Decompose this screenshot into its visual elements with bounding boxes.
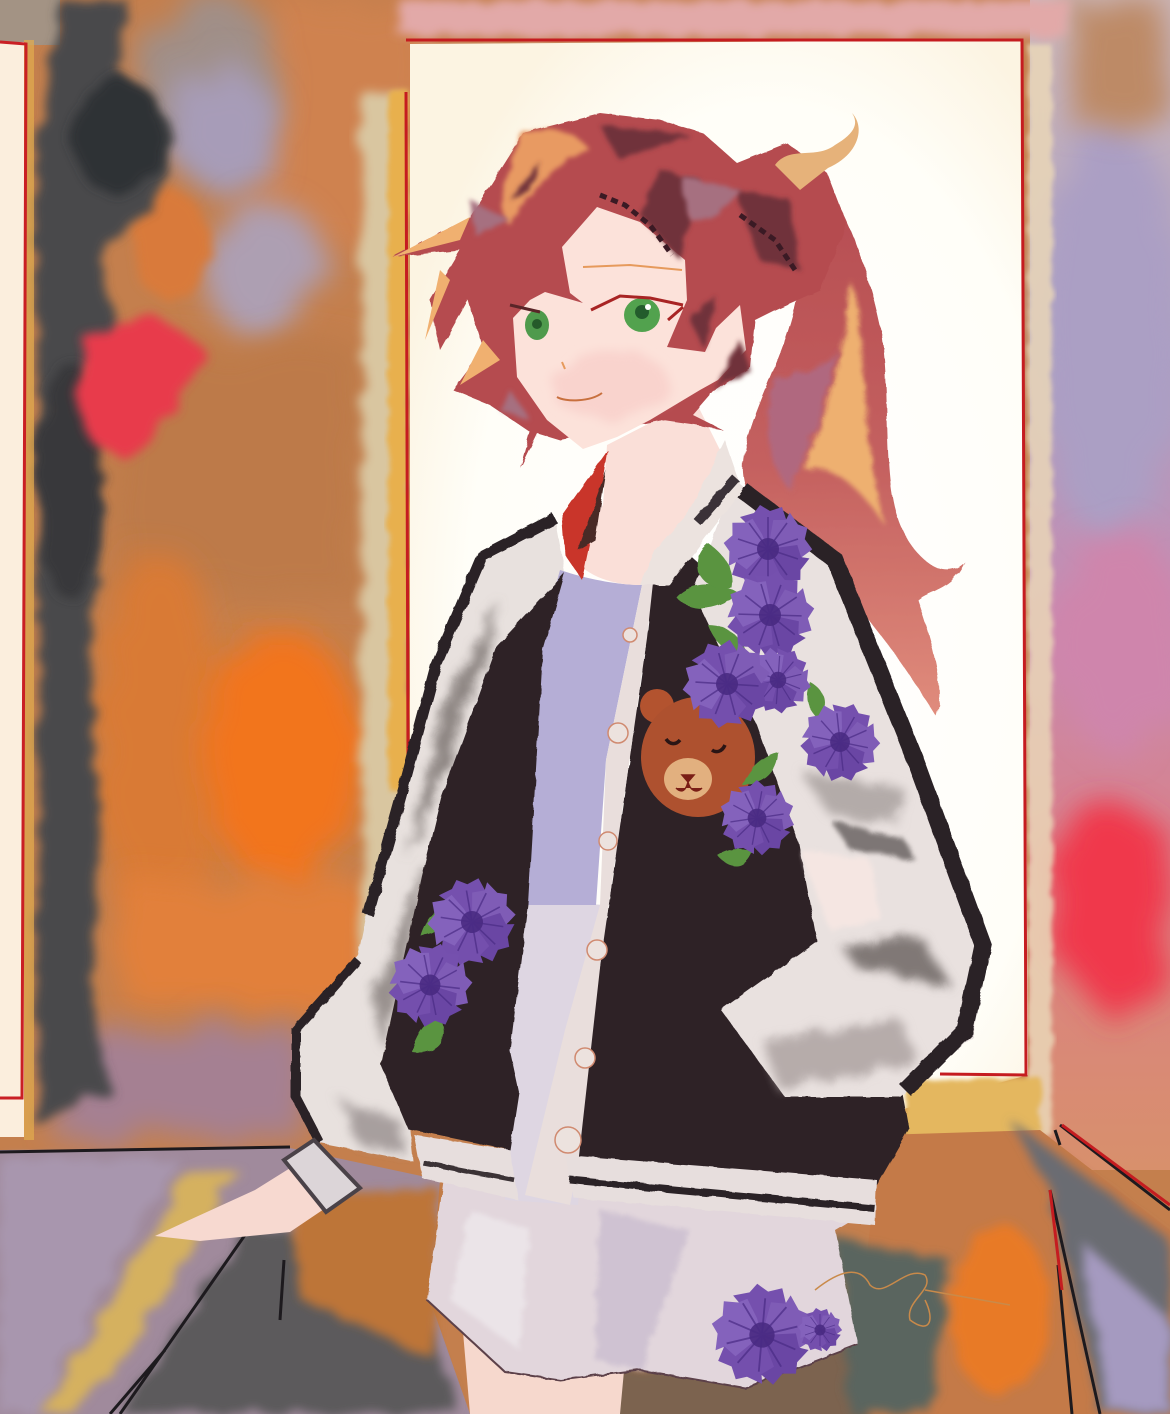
- red paint splash left: [75, 310, 205, 465]
- left raglan stripe: [368, 518, 555, 915]
- smile: [557, 393, 602, 400]
- lavender shirt: [520, 570, 642, 905]
- jacket left sleeve: [294, 518, 565, 1161]
- hair highlight: [503, 129, 590, 225]
- purple flowers: [366, 505, 898, 1400]
- signature flourish: [815, 1272, 1010, 1326]
- legs: [462, 1320, 625, 1414]
- left sleeve lower edge: [296, 960, 358, 1143]
- jacket black body left: [381, 573, 565, 1150]
- red paint splash right: [1040, 800, 1170, 1020]
- jacket right sleeve: [693, 480, 991, 1097]
- lavender wall shade right: [1040, 120, 1170, 540]
- brows and nose: [562, 265, 682, 369]
- hair lavender streak: [470, 175, 740, 420]
- doorway window: [362, 40, 1052, 1150]
- braid: [600, 195, 795, 270]
- ponytail: [743, 150, 965, 716]
- leaves: [412, 543, 824, 1052]
- face: [513, 207, 746, 449]
- left cuff: [284, 1140, 360, 1212]
- left window strip: [0, 42, 24, 1137]
- hand: [155, 1165, 330, 1241]
- cheek shading: [550, 350, 670, 420]
- hair dark streaks: [510, 125, 800, 390]
- placket white strip: [525, 555, 656, 1205]
- skirt: [427, 1170, 860, 1388]
- top pink band: [400, 0, 1070, 36]
- hair side tips: [393, 217, 500, 385]
- white waist and shorts top: [505, 900, 605, 1205]
- bear patch: [640, 689, 755, 817]
- jacket hem ribbing: [414, 1135, 877, 1225]
- jacket collar: [562, 440, 742, 585]
- left eye: [510, 305, 549, 340]
- neck and chest: [570, 400, 730, 585]
- ponytail highlight: [805, 280, 885, 525]
- head: [393, 113, 859, 468]
- floor: [0, 1120, 1170, 1414]
- top bun and ahoge: [775, 113, 859, 190]
- jacket black body right: [574, 550, 909, 1185]
- snap buttons: [555, 628, 637, 1153]
- right eye: [591, 296, 683, 332]
- hair back mass: [393, 113, 847, 468]
- dark smoke column: [30, 0, 172, 1125]
- right raglan stripe: [742, 490, 983, 1090]
